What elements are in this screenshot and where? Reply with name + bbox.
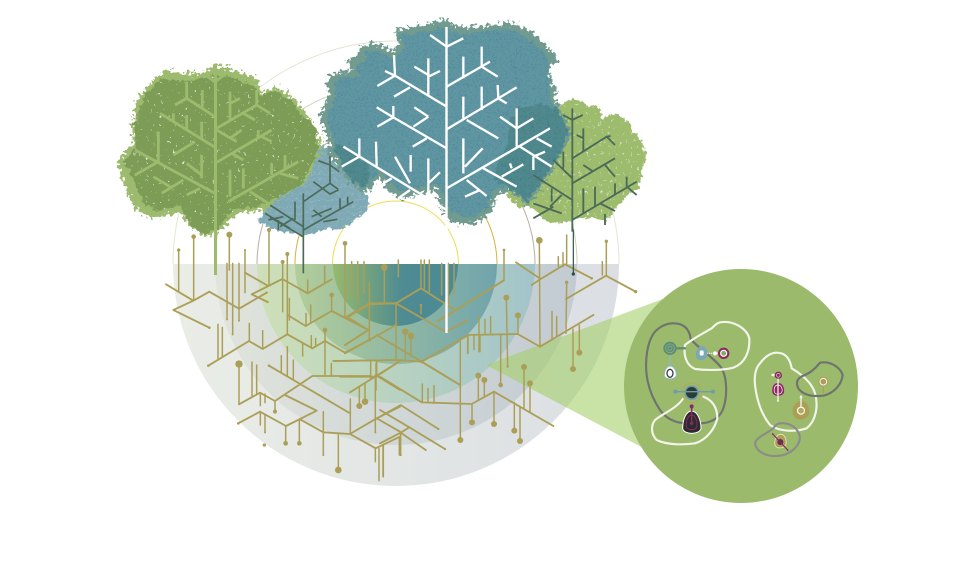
trunk: light green [214,65,217,275]
canopy overlap with pale blue tree [333,143,370,188]
canopy: teal fringe [319,19,572,224]
node: gold tree with arrow [793,395,809,420]
territory outline: white bottom [652,397,717,444]
canopy overlap with light green tree [495,103,569,202]
branches: light green [135,73,298,203]
callout circle: detail of network [624,269,858,503]
tree: pale blue, behind [257,143,369,273]
territory outline: dark grey large [646,323,726,424]
node: small gold [818,377,828,393]
node: small purple with arrow [771,372,782,379]
root network [166,228,637,481]
tree: olive green with light branches [117,65,322,275]
branches: white [342,35,552,210]
canopy: pale blue [257,143,369,236]
territory outline: white top [685,322,749,370]
tree: light green, right [505,98,647,223]
territory outline: dark grey right [797,362,843,396]
node: purple tree with white axis [772,379,784,402]
branches: light green tree [533,108,637,232]
underground semicircle zones [173,264,619,486]
trunk: white [445,27,448,333]
branches: pale blue tree [265,155,353,273]
territory outline: white right [755,353,817,431]
tree: large teal with white branches [319,19,637,333]
callout cone [486,297,668,461]
node: white seedling [664,366,676,379]
concentric arcs above ground [160,41,640,504]
canopy: teal body [327,27,566,217]
node: dark tree with purple ring [683,404,701,433]
centre of network [333,260,503,390]
canopy: dark body [124,74,318,235]
root hair verticals, left [179,230,399,481]
right side of network [380,230,637,477]
node: blue tree linked to purple [696,346,729,360]
root tips, left [177,228,376,473]
canopy: light fringe [117,66,322,237]
territory outline: grey bottom [755,423,800,456]
node: green tree with connector [663,342,685,367]
node: gold with purple centre [772,433,788,451]
canopy: light green [505,98,647,223]
branching root lines, left [166,273,402,448]
node: dark hub with blue axis [673,383,715,402]
